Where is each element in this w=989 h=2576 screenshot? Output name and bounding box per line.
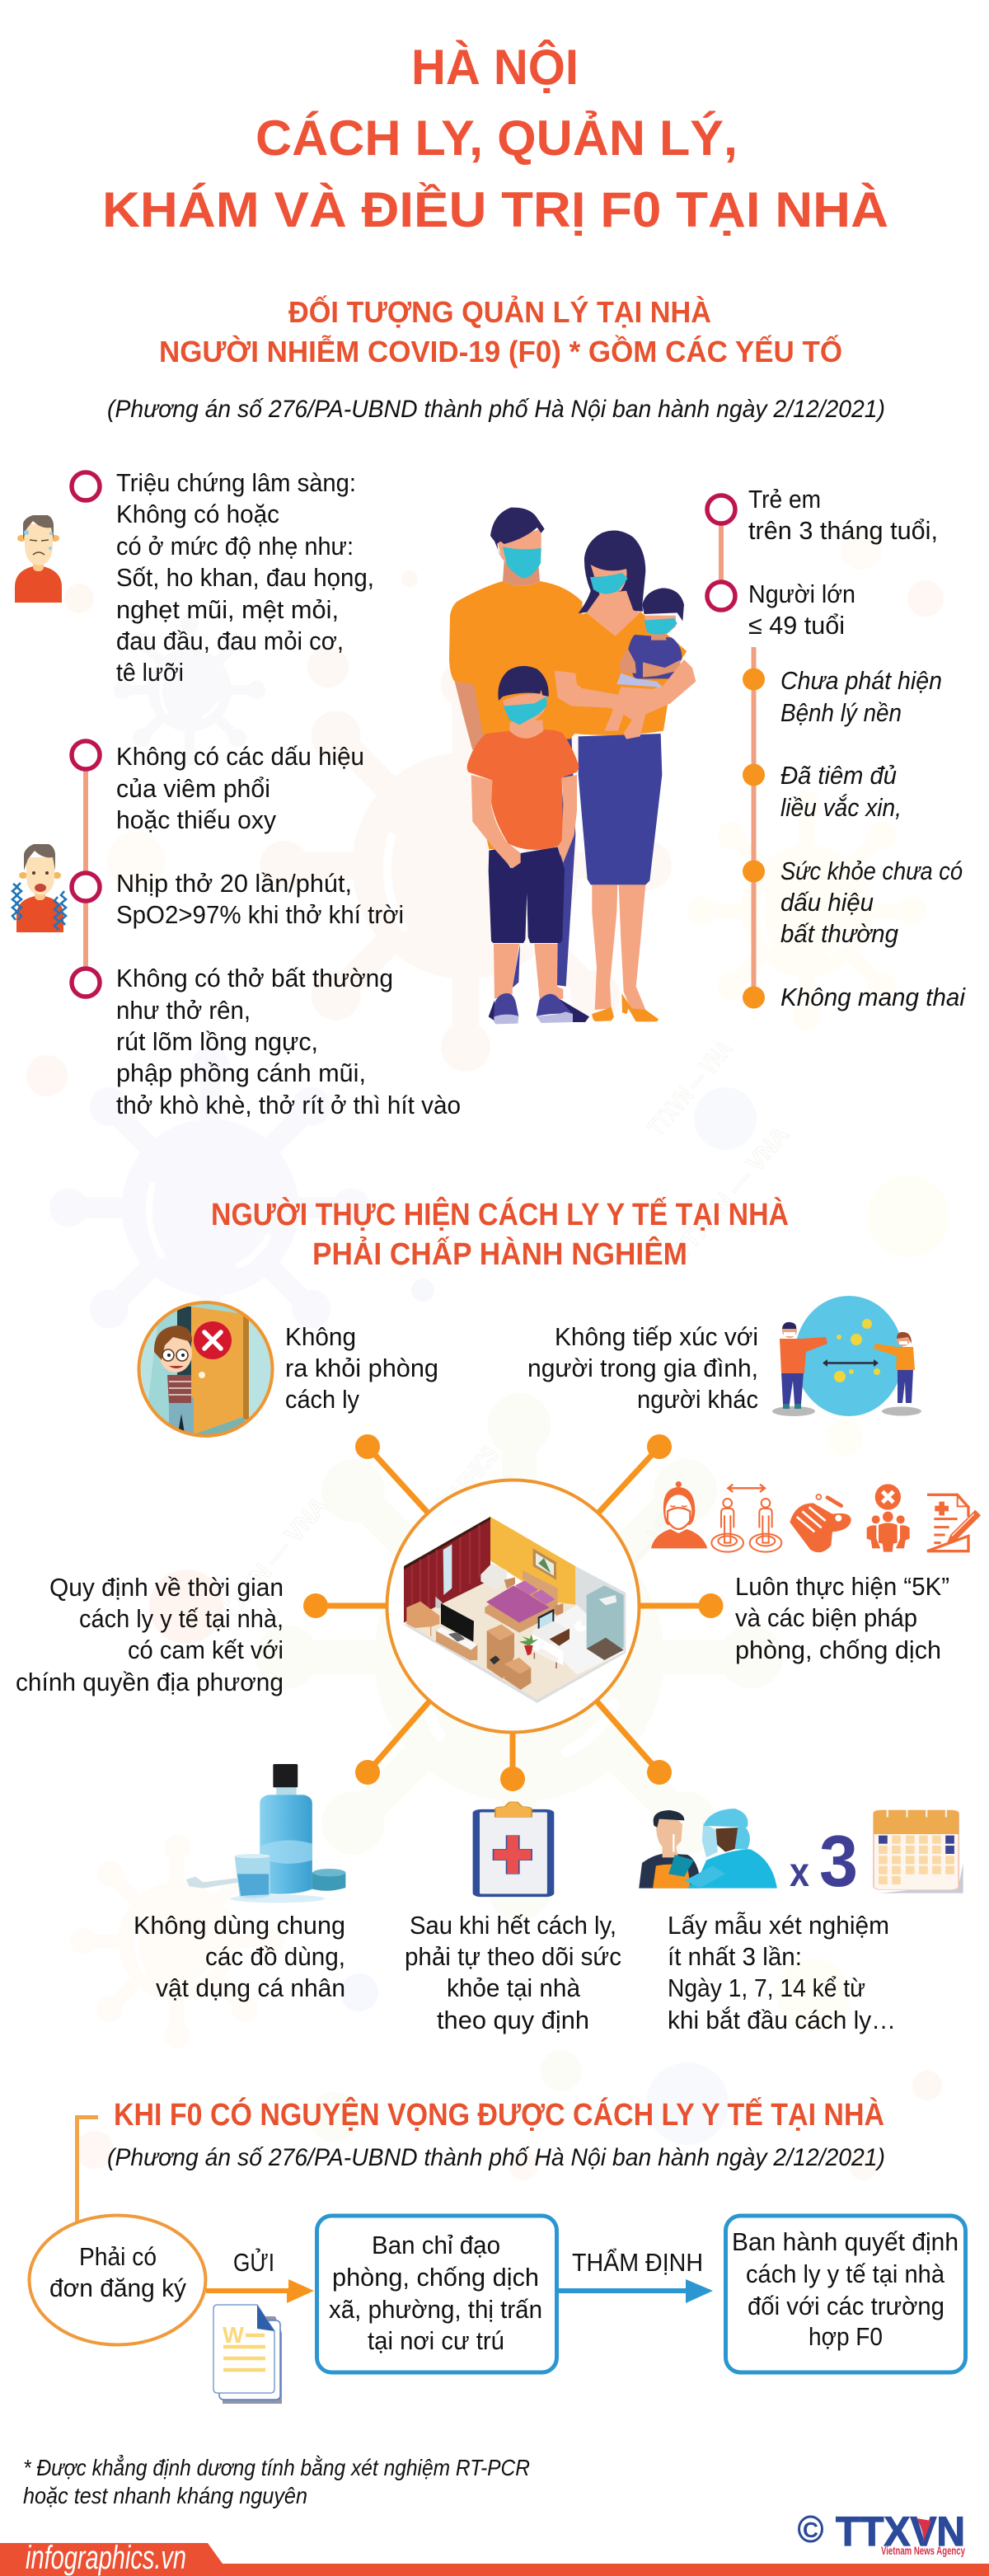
text: do not share items: các đồ dùng, — [205, 1942, 345, 1971]
text: age groups: Trẻ em — [748, 485, 821, 514]
watermarks: INFOGRAPHICS — [404, 1441, 504, 1553]
background virus pattern — [26, 528, 949, 2180]
footer band — [0, 2540, 989, 2576]
text: no abnormal breathing: thở khò khè, thở rít ở thì hít vào — [116, 1091, 461, 1119]
text: do not leave the room: Không — [285, 1322, 356, 1351]
text: conditions: liều vắc xin, — [780, 793, 902, 822]
arrow: send — [206, 2247, 314, 2303]
icon: mouthwash, cup and toothbrush — [186, 1764, 345, 1903]
multiplier x3: 3 — [819, 1820, 858, 1902]
timeline: left rings — [72, 472, 100, 997]
hub circle — [387, 1480, 640, 1733]
text: no abnormal breathing: Không có thở bất thường — [116, 964, 393, 992]
icon: social distancing — [772, 1296, 921, 1416]
title: KHÁM VÀ ĐIỀU TRỊ F0 TẠI NHÀ — [102, 182, 888, 237]
text: conditions: bất thường — [780, 919, 898, 948]
arrow: appraise — [558, 2248, 713, 2303]
text: self-monitor: Sau khi hết cách ly, — [410, 1911, 616, 1940]
text: age groups — [748, 485, 938, 640]
text: no pneumonia signs: hoặc thiếu oxy — [116, 805, 276, 834]
text: clinical symptoms: nghẹt mũi, mệt mỏi, — [116, 595, 339, 624]
text: breathing rate: SpO2>97% khi thở khí trời — [116, 900, 404, 929]
icon: child behind door — [136, 1298, 280, 1438]
step 2: steering committee: xã, phường, thị trấn — [329, 2295, 542, 2324]
logo: TTXVN: TTXVN — [836, 2508, 965, 2555]
timeline: orange dots — [743, 647, 765, 1009]
father — [449, 508, 583, 849]
text: time regulation — [16, 1573, 284, 1696]
step 3: decision — [725, 2216, 966, 2372]
title: HÀ NỘI — [411, 40, 579, 95]
text: testing schedule: khi bắt đầu cách ly… — [668, 2006, 896, 2034]
heading: khi F0 có nguyện vọng: KHI F0 CÓ NGUYỆN VỌNG ĐƯỢC CÁCH LY Y TẾ TẠI NHÀ — [114, 2096, 884, 2133]
watermarks: TTXVN — VNA — [668, 1121, 794, 1265]
step 1: registration: đơn đăng ký — [49, 2273, 186, 2302]
text: clinical symptoms: đau đầu, đau mỏi cơ, — [116, 626, 344, 655]
text: time regulation: có cam kết với — [128, 1635, 284, 1664]
footnote: * Được khẳng định dương tính bằng xét nghiệm RT-PCR — [23, 2454, 530, 2480]
icons: 5K — [651, 1481, 981, 1552]
text: breathing rate — [116, 869, 404, 929]
title — [102, 40, 888, 237]
watermarks: TTXVN — VNA — [569, 1492, 696, 1635]
text: age groups: Người lớn — [748, 579, 855, 608]
multiplier x3 — [790, 1820, 858, 1902]
text: do not leave the room — [285, 1322, 438, 1414]
step 3: decision: đối với các trường — [748, 2292, 944, 2320]
father trousers and shoes — [513, 734, 575, 988]
text: clinical symptoms: Không có hoặc — [116, 500, 279, 528]
icon: nasal swab test — [639, 1809, 777, 1889]
text: no pneumonia signs — [116, 742, 364, 834]
footer band: infographics.vn — [26, 2540, 186, 2576]
hub spokes — [303, 1434, 724, 1791]
text: no abnormal breathing: rút lõm lồng ngực, — [116, 1027, 318, 1056]
icon: medical clipboard — [476, 1802, 551, 1895]
step 2: steering committee: Ban chỉ đạo — [372, 2231, 500, 2259]
icon: health declaration — [927, 1494, 981, 1551]
icon: person short of breath — [12, 844, 66, 932]
watermarks — [206, 1035, 794, 1635]
text: clinical symptoms: Triệu chứng lâm sàng: — [116, 468, 356, 497]
logo: TTXVN: C — [803, 2517, 818, 2542]
text: clinical symptoms: tê lưỡi — [116, 658, 184, 687]
heading: đối tượng quản lý: NGƯỜI NHIỄM COVID-19 (F0) * GỒM CÁC YẾU TỐ — [159, 334, 842, 368]
text: do not leave the room: cách ly — [285, 1385, 359, 1414]
text: time regulation: chính quyền địa phương — [16, 1668, 284, 1696]
step 1: registration: Phải có — [79, 2242, 157, 2271]
text: testing schedule: Lấy mẫu xét nghiệm — [668, 1911, 889, 1940]
text: clinical symptoms: Sốt, ho khan, đau họng, — [116, 563, 374, 592]
text: do not share items — [134, 1911, 345, 2002]
text: conditions: Đã tiêm đủ — [780, 761, 897, 790]
text: no pneumonia signs: của viêm phổi — [116, 774, 270, 803]
icon: distance — [711, 1485, 781, 1552]
step 3: decision: cách ly y tế tại nhà — [746, 2259, 945, 2288]
icon: document: W — [223, 2322, 245, 2348]
heading: đối tượng quản lý — [159, 294, 842, 368]
watermarks: TTXVN — VNA — [206, 1492, 333, 1635]
text: no contact: người trong gia đình, — [527, 1354, 758, 1382]
mother arm — [555, 659, 696, 715]
text: no abnormal breathing — [116, 964, 461, 1119]
text: no abnormal breathing: như thở rên, — [116, 996, 251, 1025]
heading: phải chấp hành nghiêm: PHẢI CHẤP HÀNH NGHIÊM — [312, 1236, 687, 1272]
icon: sick person sweating — [15, 515, 62, 603]
step 2: steering committee — [316, 2216, 557, 2372]
text: conditions: Bệnh lý nền — [780, 698, 902, 727]
text: testing schedule: ít nhất 3 lần: — [668, 1942, 802, 1971]
source note 2: (Phương án số 276/PA-UBND thành phố Hà Nội ban hành ngày 2/12/2021) — [107, 2144, 885, 2171]
text: clinical symptoms: có ở mức độ nhẹ như: — [116, 532, 354, 561]
text: conditions: dấu hiệu — [780, 888, 874, 917]
text: always follow 5K: và các biện pháp — [735, 1603, 917, 1632]
source note: (Phương án số 276/PA-UBND thành phố Hà Nội ban hành ngày 2/12/2021) — [107, 396, 885, 423]
arrow: appraise: THẨM ĐỊNH — [572, 2248, 703, 2277]
text: no contact: người khác — [637, 1385, 758, 1414]
illustration: family wearing masks — [449, 508, 696, 1024]
text: time regulation: Quy định về thời gian — [49, 1573, 284, 1602]
text: testing schedule: Ngày 1, 7, 14 kể từ — [668, 1973, 865, 2002]
icon: hand washing — [790, 1494, 851, 1552]
mother — [552, 530, 687, 1021]
icon: no gathering — [867, 1484, 910, 1552]
step 2: steering committee: phòng, chống dịch — [332, 2263, 539, 2292]
text: conditions: Sức khỏe chưa có — [780, 856, 963, 885]
illustration: isometric room — [402, 1517, 626, 1703]
child — [467, 666, 579, 1024]
icon: document — [213, 2305, 282, 2404]
step 3: decision: hợp F0 — [809, 2322, 883, 2351]
text: do not share items: vật dụng cá nhân — [156, 1973, 345, 2002]
step 3: decision: Ban hành quyết định — [732, 2227, 959, 2256]
text: testing schedule — [668, 1911, 896, 2034]
text: self-monitor: phải tự theo dõi sức — [405, 1942, 621, 1971]
text: conditions — [780, 666, 966, 1011]
timeline: right rings — [707, 495, 735, 610]
text: conditions: Không mang thai — [780, 983, 966, 1011]
text: no abnormal breathing: phập phồng cánh mũi, — [116, 1058, 366, 1087]
icon: woman with mask — [651, 1481, 707, 1548]
text: conditions: Chưa phát hiện — [780, 666, 942, 695]
arrow: send: GỬI — [233, 2247, 274, 2277]
title: CÁCH LY, QUẢN LÝ, — [255, 110, 738, 166]
text: always follow 5K: phòng, chống dịch — [735, 1635, 941, 1664]
text: self-monitor: khỏe tại nhà — [447, 1973, 581, 2002]
text: breathing rate: Nhịp thở 20 lần/phút, — [116, 869, 352, 898]
bracket line — [77, 2117, 98, 2222]
heading: đối tượng quản lý: ĐỐI TƯỢNG QUẢN LÝ TẠI NHÀ — [288, 294, 711, 329]
text: no contact: Không tiếp xúc với — [555, 1322, 758, 1351]
text: do not share items: Không dùng chung — [134, 1911, 345, 1940]
text: no contact — [527, 1322, 758, 1414]
text: age groups: trên 3 tháng tuổi, — [748, 516, 938, 545]
multiplier x3: x — [790, 1849, 809, 1895]
heading: phải chấp hành nghiêm — [211, 1196, 789, 1272]
text: always follow 5K — [735, 1572, 949, 1664]
footnote — [23, 2454, 530, 2508]
watermarks: TTXVN — VNA — [643, 1035, 738, 1141]
text: self-monitor — [405, 1911, 621, 2034]
step 1: registration — [30, 2216, 206, 2344]
heading: phải chấp hành nghiêm: NGƯỜI THỰC HIỆN CÁCH LY Y TẾ TẠI NHÀ — [211, 1196, 789, 1232]
text: clinical symptoms — [116, 468, 374, 687]
text: time regulation: cách ly y tế tại nhà, — [79, 1604, 284, 1633]
icon: calendar — [874, 1809, 963, 1893]
text: no pneumonia signs: Không có các dấu hiệu — [116, 742, 364, 771]
text: always follow 5K: Luôn thực hiện “5K” — [735, 1572, 949, 1601]
footnote: hoặc test nhanh kháng nguyên — [23, 2483, 307, 2508]
step 2: steering committee: tại nơi cư trú — [368, 2326, 504, 2355]
baby — [604, 588, 684, 739]
text: self-monitor: theo quy định — [437, 2006, 589, 2034]
text: age groups: ≤ 49 tuổi — [748, 611, 845, 640]
text: do not leave the room: ra khỏi phòng — [285, 1354, 438, 1382]
